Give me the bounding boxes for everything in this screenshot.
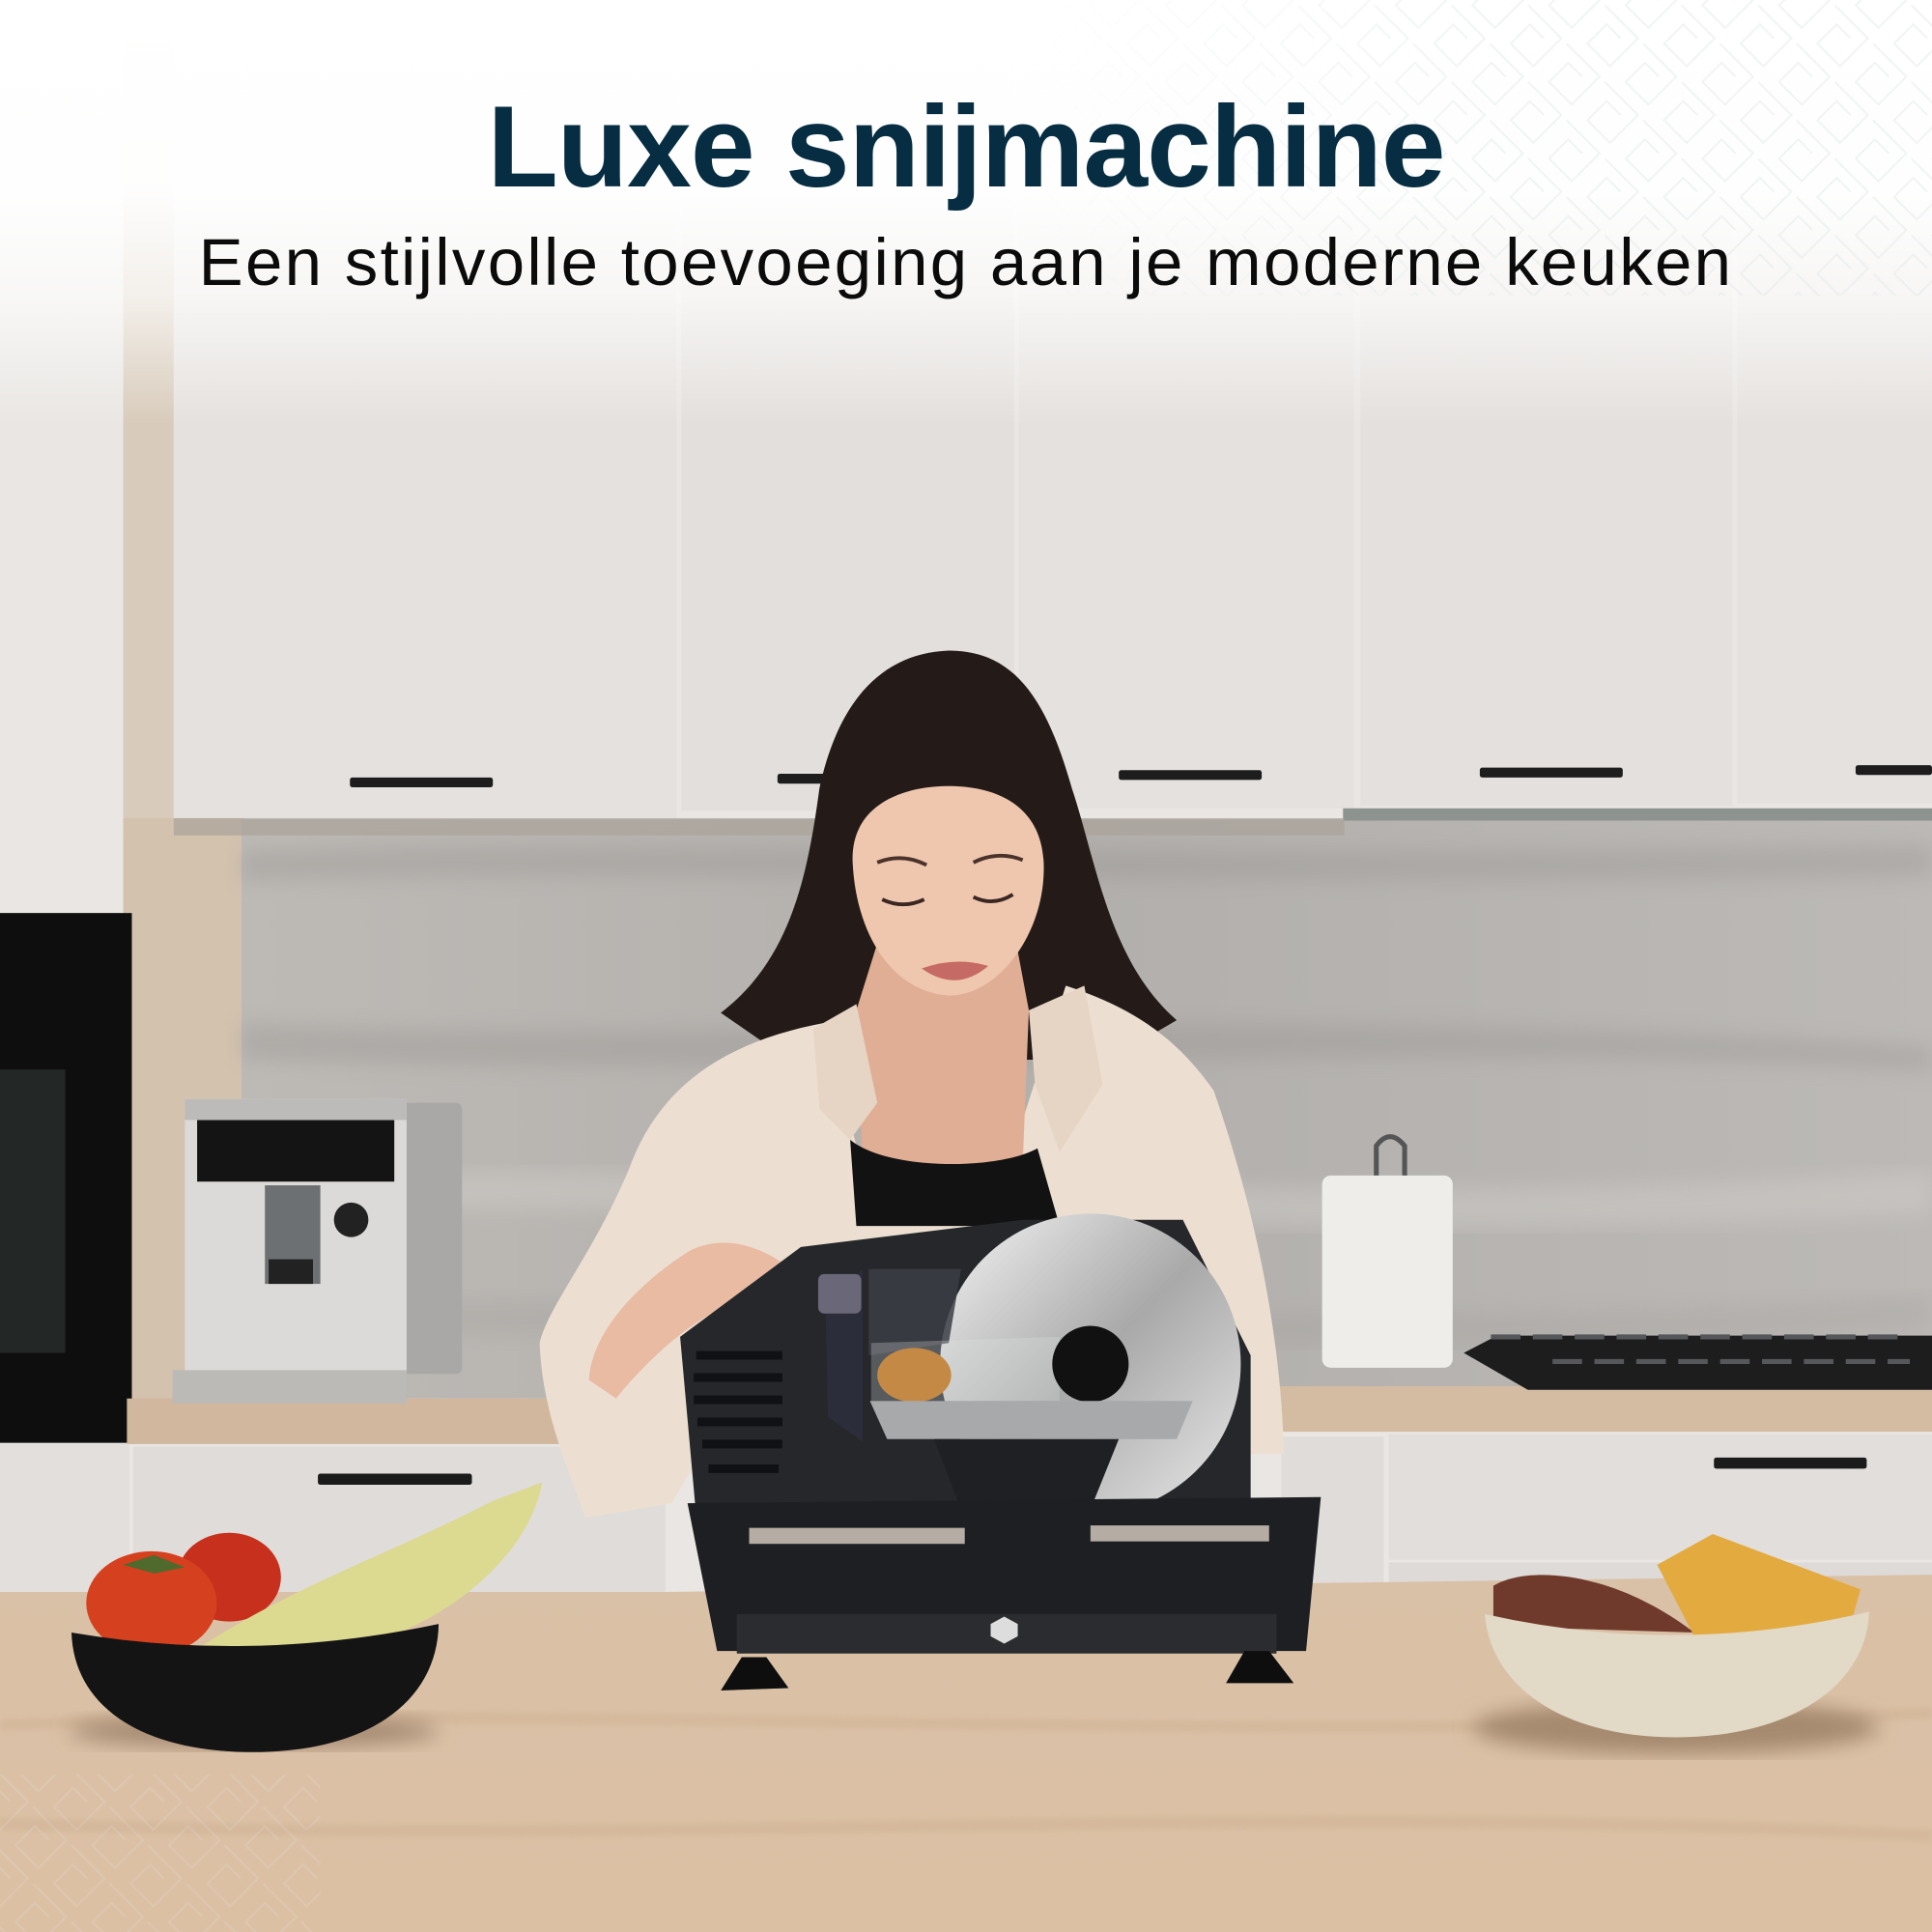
top — [850, 1140, 1060, 1226]
wooden table — [0, 1575, 1932, 1932]
upper cabinets — [174, 0, 1932, 836]
title: Luxe snijmachine — [487, 82, 1445, 212]
shirt — [540, 985, 1284, 1518]
gas hob — [1463, 1336, 1932, 1390]
white top fade — [0, 0, 1932, 425]
bowl with vegetables — [69, 1482, 542, 1752]
meat slicer — [680, 1213, 1321, 1690]
maze pattern corner — [1300, 0, 1932, 296]
paper towel roll — [1322, 1137, 1453, 1368]
bowl with bread and meat — [1472, 1534, 1879, 1754]
woman — [540, 650, 1284, 1518]
collar — [813, 985, 1103, 1152]
coffee machine — [173, 1099, 462, 1404]
arm and hand — [589, 1243, 826, 1399]
face — [853, 786, 1044, 996]
hair — [721, 650, 1177, 1060]
subtitle: Een stijlvolle toevoeging aan je moderne keuken — [199, 225, 1733, 299]
neck and chest — [856, 912, 1029, 1164]
slicer base — [688, 1497, 1321, 1651]
oven — [0, 913, 131, 1443]
worktop and lower cabinets — [0, 1386, 1932, 1592]
